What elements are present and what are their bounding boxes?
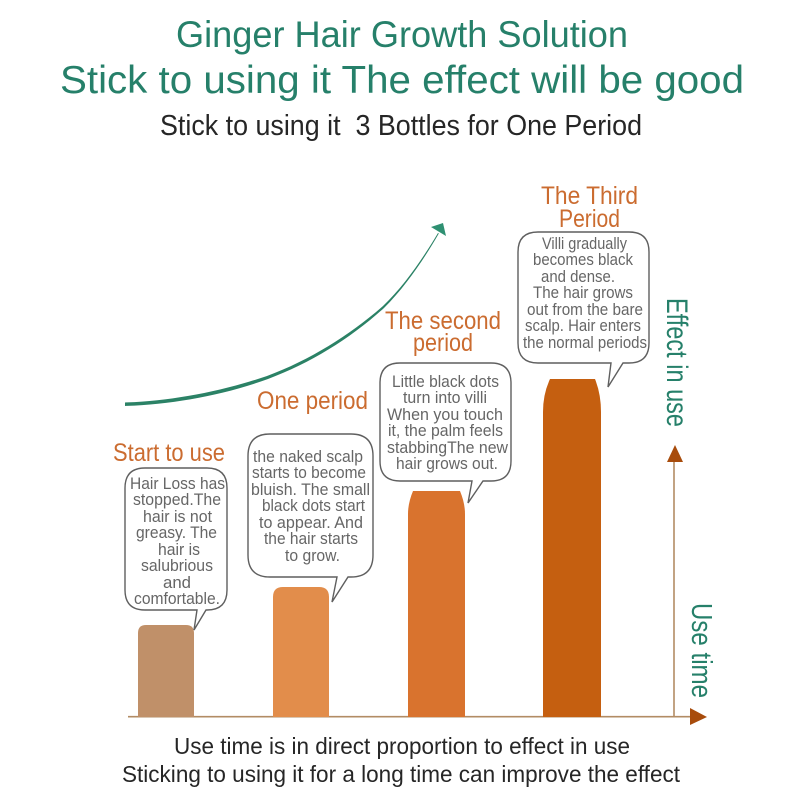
subheading: bottles per period: Stick to using it 3 Bottles for One Period [160, 110, 642, 142]
callout: one period: bluish. The small [251, 481, 370, 499]
callout: second period: it, the palm feels [388, 422, 503, 440]
callout: start to use: Hair Loss has [130, 475, 225, 493]
label: the second period: period [413, 329, 473, 357]
callout: start to use [125, 468, 227, 630]
callout: start to use: stopped.The [133, 491, 221, 509]
label: start to use: Start to use [113, 439, 225, 467]
caption: direct proportion: Use time is in direct proportion to effect in use [174, 733, 630, 759]
icon: time axis arrowhead [690, 708, 707, 725]
callout: second period: When you touch [387, 406, 503, 424]
icon: effect axis arrowhead [667, 445, 683, 462]
callout: start to use: and [163, 574, 191, 592]
label: the second period: The second [385, 307, 501, 335]
callout: start to use: hair is [158, 541, 200, 559]
callout: one period: black dots start [262, 497, 365, 515]
callout: second period: stabbingThe new [387, 439, 508, 457]
callout: start to use: greasy. The [136, 524, 217, 542]
callout: third period: out from the bare [527, 301, 643, 319]
label: the third period [541, 182, 638, 233]
callout: third period [518, 232, 649, 387]
label: one period: One period [257, 387, 368, 415]
axis label: effect in use: Effect in use [660, 298, 693, 427]
label: the third period: The Third [541, 182, 638, 210]
bar: second period [408, 491, 465, 717]
callout: start to use: salubrious [141, 557, 213, 575]
callout: second period: hair grows out. [396, 455, 498, 473]
callout: second period [380, 363, 511, 503]
callout: start to use: comfortable. [134, 590, 220, 608]
callout: one period: the hair starts [264, 530, 358, 548]
axes: time and effect [128, 445, 692, 717]
caption: long-term use: Sticking to using it for a long time can improve the effect [122, 761, 681, 787]
callout: third period: scalp. Hair enters [525, 317, 641, 335]
callout: start to use: hair is not [143, 508, 212, 526]
label: the third period: Period [559, 205, 620, 233]
axis label: use time: Use time [685, 603, 717, 698]
callout: one period [248, 434, 373, 602]
callout: one period: the naked scalp [253, 448, 363, 466]
callout: one period: to appear. And [259, 514, 363, 532]
callout: third period: and dense. [541, 268, 615, 286]
title: product name: Ginger Hair Growth Solution [176, 14, 628, 55]
bar: start to use [138, 625, 194, 717]
arrow: rising growth curve [125, 223, 446, 406]
bar: third period [543, 379, 601, 717]
callout: second period: Little black dots [392, 373, 499, 391]
callout: one period: starts to become [252, 464, 366, 482]
callout: one period: to grow. [285, 547, 340, 565]
callout: third period: the normal periods [523, 334, 647, 352]
heading: effect slogan: Stick to using it The effect will be good [60, 59, 744, 102]
callout: third period: Villi gradually [542, 235, 628, 253]
callout: third period: The hair grows [533, 284, 633, 302]
label: the second period [385, 307, 501, 357]
callout: third period: becomes black [533, 251, 634, 269]
callout: second period: turn into villi [403, 389, 487, 407]
bar: one period [273, 587, 329, 717]
